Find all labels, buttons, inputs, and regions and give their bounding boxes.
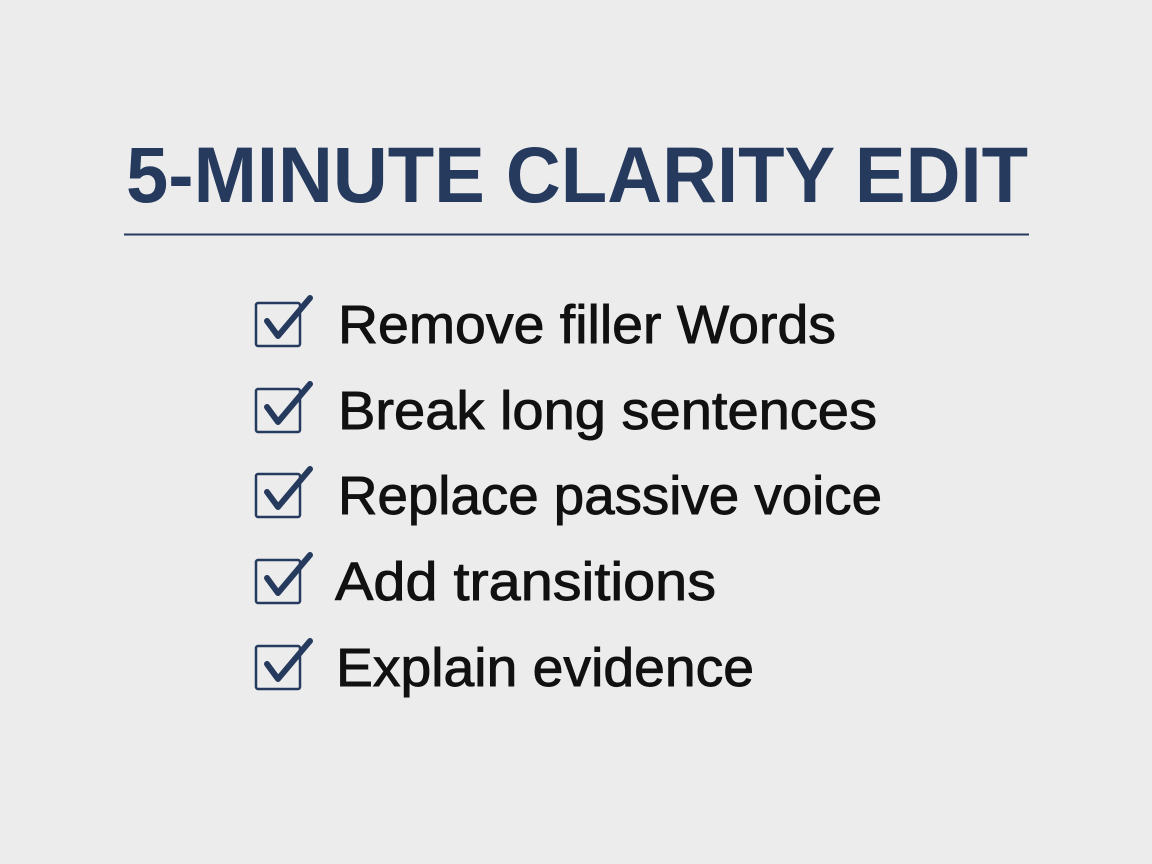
icon: checkbox 5	[256, 641, 310, 689]
item 3: Replace passive voice	[338, 466, 882, 526]
icon: checkbox 3	[256, 469, 310, 517]
item 4: Add transitions	[335, 552, 716, 612]
item 1: Remove filler Words	[338, 295, 836, 355]
icon: checkbox 2	[256, 384, 310, 432]
item 5: Explain evidence	[336, 638, 754, 698]
checklist	[256, 295, 882, 698]
item 2: Break long sentences	[338, 381, 877, 441]
icon: checkbox 4	[256, 555, 310, 603]
icon: checkbox 1	[256, 298, 310, 346]
title: 5-MINUTE CLARITY EDIT	[126, 130, 1028, 219]
